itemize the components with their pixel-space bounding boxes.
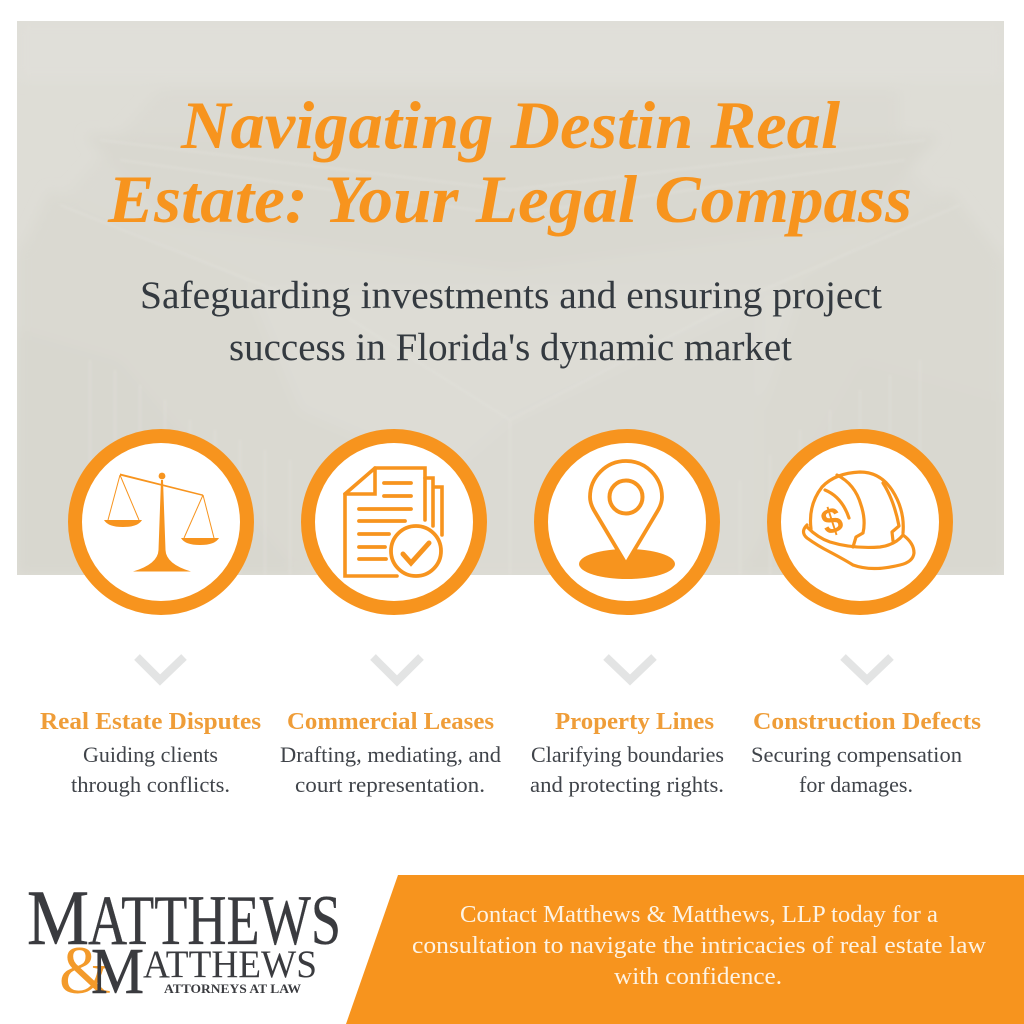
column: construction defects [751,709,981,797]
logo: Matthews & Matthews: & [59,932,111,1008]
column: property lines [530,709,724,797]
column: real estate disputes: through conflicts. [71,772,230,797]
column: commercial leases: Commercial Leases [287,709,494,735]
column: real estate disputes: Guiding clients [83,742,218,767]
logo: Matthews & Matthews: ATTORNEYS AT LAW [164,981,301,996]
title: Estate: Your Legal Compass [107,161,912,237]
arrow: chevron 1 [137,657,184,680]
icon: hard hat with dollar sign: $ [816,498,848,543]
column: commercial leases [280,709,501,797]
column: real estate disputes: Real Estate Disputes [40,709,261,735]
panel: call to action: Contact Matthews & Matthews, LLP today for a [460,902,938,928]
icon: hard hat with dollar sign [774,436,946,608]
subtitle [140,274,882,369]
panel: hero construction-site background [17,21,1004,575]
icon: scales of justice [75,436,247,608]
subtitle: Safeguarding investments and ensuring project [140,274,882,317]
column: property lines: Clarifying boundaries [531,742,724,767]
logo: Matthews & Matthews: ATTHEWS [143,943,317,986]
arrow: chevron 4 [843,657,891,680]
column: construction defects: for damages. [799,772,913,797]
column: real estate disputes [40,709,261,797]
column: property lines: and protecting rights. [530,772,724,797]
icon: map location pin [541,436,713,608]
logo: Matthews & Matthews: M [27,874,89,961]
panel: call to action: with confidence. [614,964,782,990]
subtitle: success in Florida's dynamic market [229,326,792,369]
column: commercial leases: court representation. [295,772,485,797]
arrow: chevron 3 [606,657,654,680]
column: construction defects: Securing compensation [751,742,962,767]
arrow: chevron 2 [373,657,421,681]
title: Navigating Destin Real [180,87,840,163]
column: construction defects: Construction Defects [753,709,981,735]
panel: call to action [346,875,1024,1024]
panel: call to action: consultation to navigate the intricacies of real estate law [412,933,987,959]
logo: Matthews & Matthews: M [91,935,144,1008]
column: property lines: Property Lines [555,709,714,735]
logo: Matthews & Matthews: ATTHEWS [88,882,341,960]
logo: Matthews & Matthews [27,874,341,1008]
title [107,87,912,237]
column: commercial leases: Drafting, mediating, and [280,742,501,767]
icon: legal document with check mark [308,436,480,608]
